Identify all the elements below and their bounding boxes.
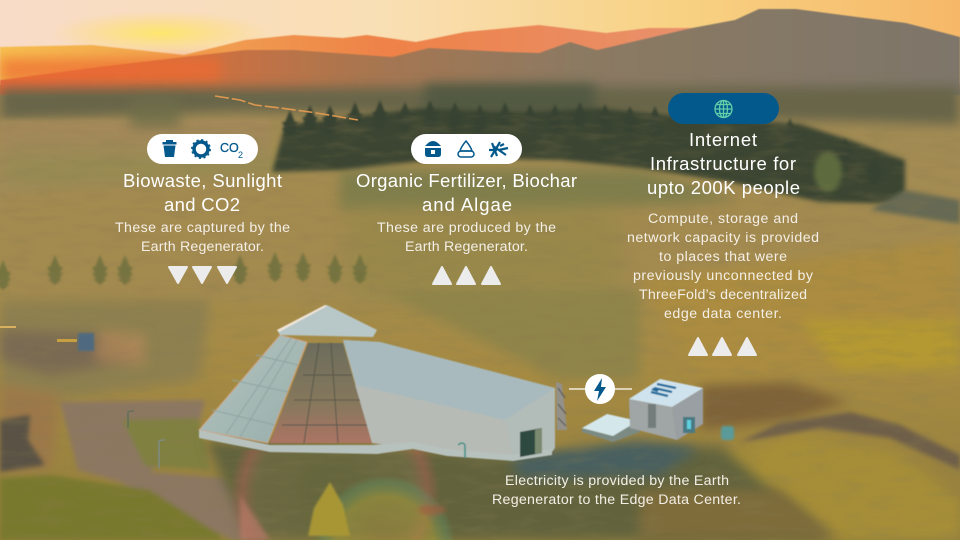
text: internet description: previously unconnected by <box>633 268 814 284</box>
icon: CO2 label: 2 <box>238 150 243 160</box>
lens flare <box>225 450 440 540</box>
icon: biochar flame <box>458 141 474 157</box>
icon: algae <box>489 142 508 157</box>
text: inputs description <box>115 220 290 255</box>
wall <box>343 340 555 457</box>
mid fields <box>0 170 960 300</box>
pipe <box>458 443 465 458</box>
lower fields <box>0 240 960 540</box>
text: outputs description: Earth Regenerator. <box>405 239 528 255</box>
solar panel block <box>582 421 640 442</box>
text: outputs description <box>377 220 556 255</box>
icon: globe <box>715 100 732 118</box>
icon: CO2 label <box>220 141 243 160</box>
pill: internet icon <box>668 93 779 124</box>
dark ground around buildings <box>205 440 830 540</box>
heading: inputs: Biowaste, Sunlight <box>123 170 282 191</box>
text: electricity caption: Regenerator to the Edge Data Center. <box>492 492 741 508</box>
text: electricity caption <box>492 473 741 508</box>
icon: sun gear <box>192 140 210 158</box>
icon: CO2 label: CO <box>220 141 239 155</box>
text: internet description: Compute, storage and <box>648 211 798 227</box>
text: internet description: network capacity is provided <box>627 230 819 246</box>
arrows: up triangles (internet) <box>689 338 756 355</box>
hazy forest behind the fields <box>0 86 960 125</box>
pyramid central window <box>270 343 372 443</box>
text: electricity caption: Electricity is provided by the Earth <box>505 473 729 489</box>
foreground left <box>0 330 145 470</box>
ladder side structure <box>556 382 567 430</box>
heading: internet: upto 200K people <box>647 177 800 198</box>
text: internet description: to places that were <box>659 249 787 265</box>
icon: fertilizer bag <box>425 141 441 157</box>
connector: power link <box>569 374 632 404</box>
text: outputs description: These are produced by the <box>377 220 556 236</box>
heading: inputs: and CO2 <box>164 194 240 215</box>
heading: internet: Internet <box>689 129 757 150</box>
treeline <box>272 108 905 204</box>
heading: outputs: Organic Fertilizer, Biochar <box>356 170 577 191</box>
heading: internet <box>647 129 800 198</box>
pyramid roof cap <box>277 305 377 337</box>
text: inputs description: These are captured by the <box>115 220 290 236</box>
icon: lightning bolt <box>594 378 606 401</box>
field texture <box>0 115 960 540</box>
text: internet description: edge data center. <box>664 306 782 322</box>
left trees <box>0 252 368 290</box>
heading: outputs: and Algae <box>422 194 512 215</box>
text: inputs description: Earth Regenerator. <box>141 239 264 255</box>
pyramid left glass <box>199 335 307 443</box>
arrows: up triangles (outputs) <box>433 267 500 284</box>
pill: outputs icons <box>411 134 522 164</box>
cube <box>629 399 677 440</box>
door <box>520 428 542 457</box>
illustration: edge data center <box>582 379 703 442</box>
arrows: down triangles <box>169 267 236 283</box>
text: internet description: ThreeFold’s decentralized <box>639 287 807 303</box>
heading: outputs <box>356 170 577 215</box>
text: internet description <box>627 211 819 322</box>
heading: internet: Infrastructure for <box>650 153 796 174</box>
pill: inputs icons <box>147 134 258 164</box>
base band <box>199 430 552 461</box>
illustration: Earth Regenerator building <box>199 305 567 461</box>
icon: bin <box>162 140 176 157</box>
small cans/poles <box>128 411 134 428</box>
heading: inputs <box>123 170 282 215</box>
glowing road <box>215 96 358 120</box>
roof of long hall <box>343 340 555 420</box>
